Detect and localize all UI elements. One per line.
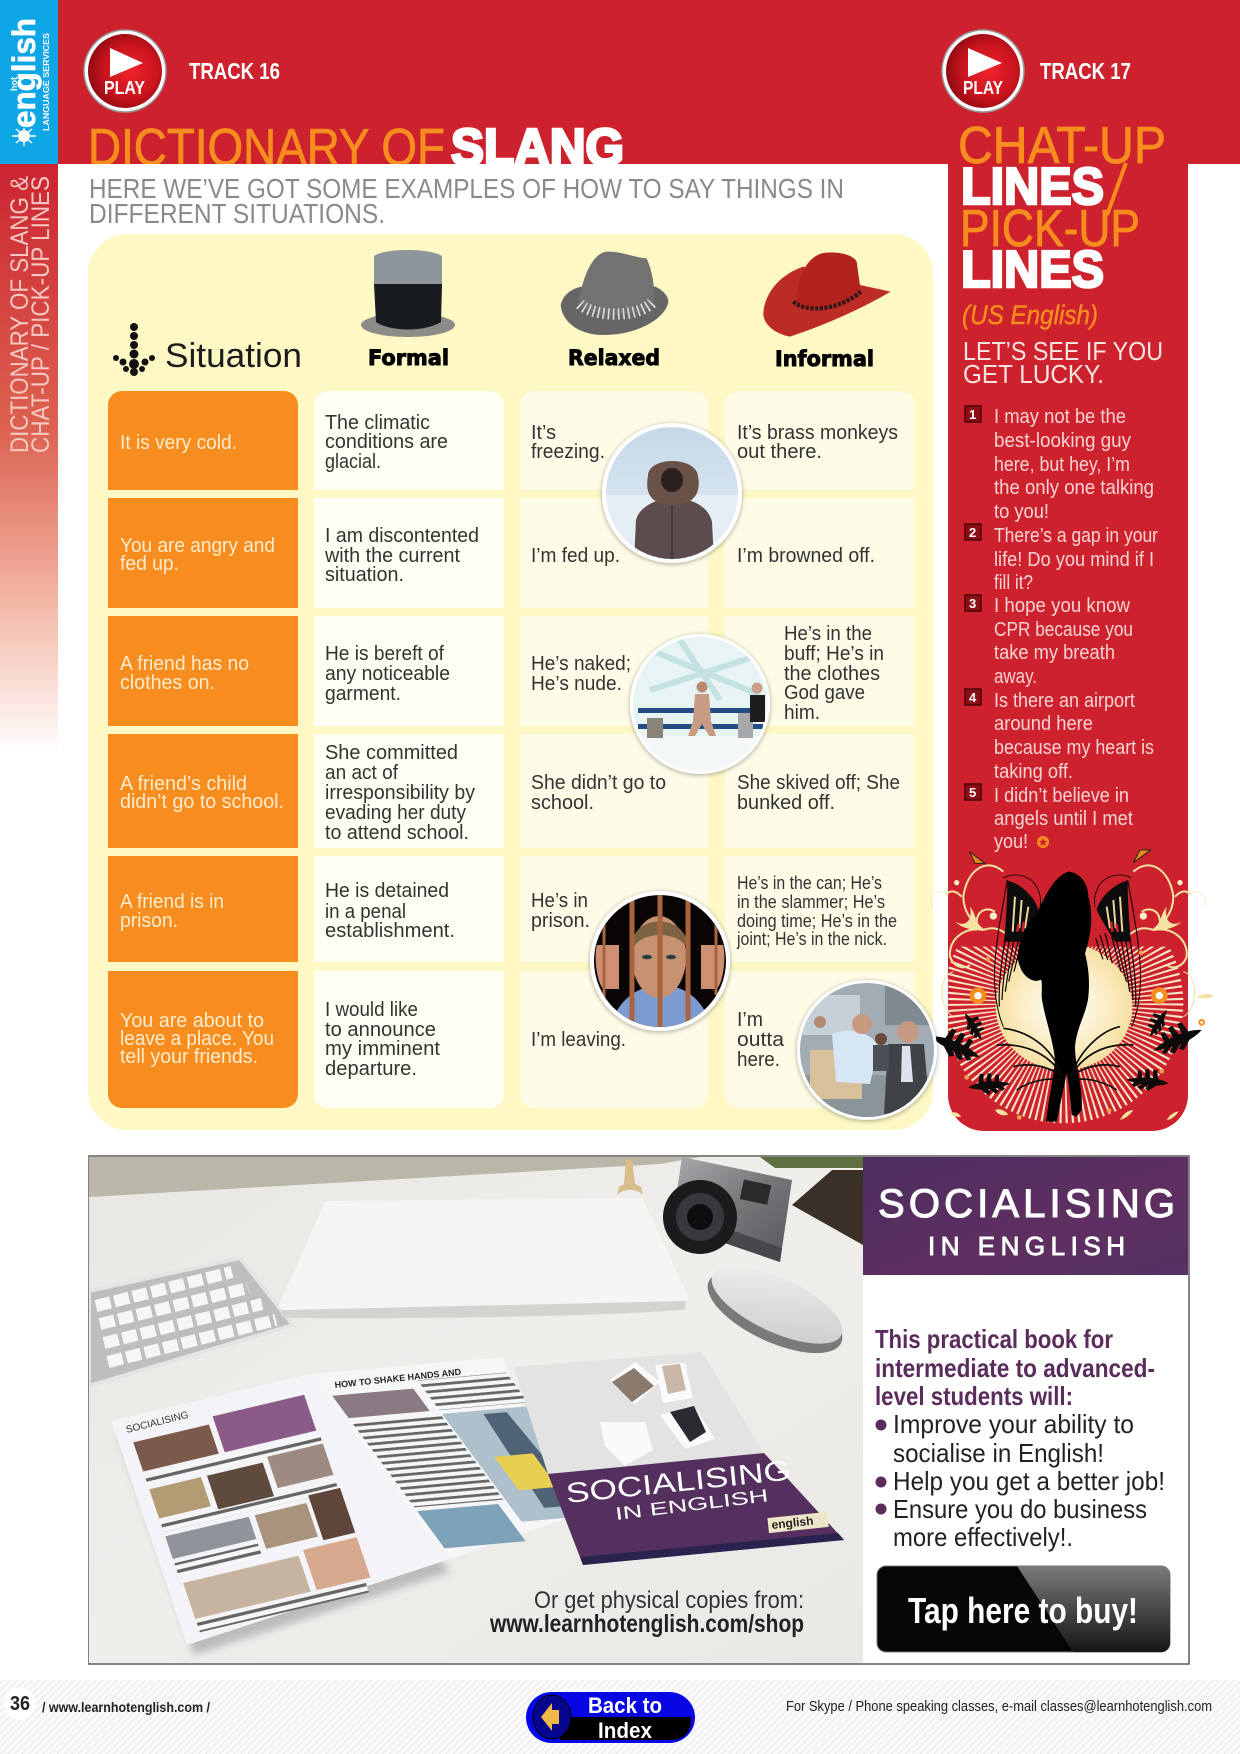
- button: tap here to buy: Tap here to buy!: [908, 1590, 1138, 1631]
- mouse: [708, 1276, 842, 1354]
- book cover: IN ENGLISH: [614, 1485, 769, 1524]
- heading: chat-up lines / pick-up lines: LINES: [961, 241, 1104, 299]
- heading: chat-up lines / pick-up lines: LINES: [961, 158, 1104, 216]
- formal column text: in a penal: [325, 901, 406, 923]
- relaxed column text: prison.: [531, 910, 590, 932]
- benefit bullet list: Help you get a better job!: [893, 1466, 1165, 1496]
- list item 1: the only one talking: [994, 477, 1154, 499]
- column head: relaxed with fedora: [561, 252, 668, 370]
- photo: man in parka in the snow: [600, 423, 744, 565]
- heading: chat-up lines / pick-up lines: [958, 117, 1166, 299]
- informal column text: here.: [737, 1049, 780, 1071]
- formal column text: situation.: [325, 564, 404, 586]
- footer strip: [0, 1680, 1240, 1754]
- column head: relaxed with fedora: Relaxed: [568, 346, 660, 370]
- button: back to index: Index: [598, 1718, 653, 1743]
- list item 2: 2: [969, 525, 976, 540]
- list item 2: fill it?: [994, 572, 1033, 594]
- benefit bullet list: Ensure you do business: [893, 1494, 1147, 1524]
- informal column text: doing time; He’s in the: [737, 911, 897, 931]
- informal column text: It’s brass monkeys: [737, 422, 898, 444]
- formal column text: I am discontented: [325, 525, 479, 547]
- relaxed column text: He’s in: [531, 890, 588, 912]
- benefit bullet list: Improve your ability to: [893, 1409, 1134, 1439]
- situation column text: You are angry and: [120, 535, 275, 557]
- list item 4: taking off.: [994, 761, 1073, 783]
- page number: [4, 1688, 36, 1720]
- column head: formal with top hat: Formal: [368, 346, 449, 370]
- open magazine: left page: SOCIALISING: [125, 1410, 190, 1436]
- photo: desk with magazine: [89, 1157, 863, 1663]
- list item 1: 1: [969, 407, 976, 422]
- informal column text: out there.: [737, 441, 822, 463]
- page number: 36: [10, 1693, 30, 1715]
- relaxed column text: I’m fed up.: [531, 545, 620, 567]
- panel: chat-up lines column: [924, 117, 1214, 1131]
- situation column text: didn’t go to school.: [120, 791, 284, 813]
- situation column text: prison.: [120, 910, 178, 932]
- heading: chat-up lines / pick-up lines: CHAT-UP: [958, 117, 1166, 175]
- list item 3: away.: [994, 666, 1037, 688]
- list item 1: [965, 406, 1154, 523]
- title: dictionary of slang: [91, 127, 622, 164]
- book cover: [514, 1352, 844, 1565]
- benefit bullet list: [876, 1409, 1165, 1552]
- banner: socialising in english: [863, 1157, 1188, 1275]
- relaxed column text: It’s: [531, 422, 556, 444]
- open magazine: left page: [111, 1374, 450, 1655]
- wooden object: [617, 1159, 643, 1195]
- subheading: [89, 173, 844, 229]
- relaxed column: pale cells: [520, 391, 708, 1108]
- situation column text: leave a place. You: [120, 1028, 274, 1050]
- list item 5: I didn’t believe in: [994, 785, 1129, 807]
- benefit bullet list: more effectively!.: [893, 1522, 1073, 1552]
- photo: naked man in airport lounge: [630, 634, 770, 776]
- list item 4: because my heart is: [994, 737, 1154, 759]
- informal column text: bunked off.: [737, 792, 835, 814]
- relaxed column text: school.: [531, 792, 594, 814]
- list item 3: [965, 595, 1133, 688]
- situation column text: [120, 432, 284, 1068]
- situation column text: fed up.: [120, 553, 179, 575]
- caption: or get physical copies: www.learnhotenglish.com/shop: [489, 1610, 804, 1638]
- title: dictionary of slang: DICTIONARY OF: [88, 119, 445, 177]
- keyboard: [89, 1258, 293, 1386]
- relaxed column text: She didn’t go to: [531, 772, 666, 794]
- formal column text: glacial.: [325, 451, 381, 473]
- intro: let's see if you get lucky: GET LUCKY.: [963, 359, 1104, 389]
- formal column text: irresponsibility by: [325, 782, 475, 804]
- list item 2: There’s a gap in your: [994, 525, 1158, 547]
- relaxed column text: He’s nude.: [531, 673, 622, 695]
- book cover: SOCIALISING: [564, 1455, 792, 1509]
- informal column text: God gave: [784, 682, 865, 704]
- informal column: pale cells: [725, 391, 915, 1108]
- advert blurb: intermediate to advanced-: [875, 1353, 1155, 1383]
- subheading: DIFFERENT SITUATIONS.: [89, 198, 385, 229]
- list item 2: life! Do you mind if I: [994, 549, 1154, 571]
- informal column text: I’m browned off.: [737, 545, 875, 567]
- list item 1: to you!: [994, 501, 1049, 523]
- panel: socialising in english advert: [89, 1156, 1189, 1664]
- informal column text: in the slammer; He’s: [737, 892, 885, 912]
- formal column text: an act of: [325, 762, 398, 784]
- panel: slang table: [88, 234, 933, 1130]
- footer website: / www.learnhotenglish.com /: [42, 1699, 210, 1715]
- list item 4: [965, 689, 1154, 783]
- list item 1: here, but hey, I’m: [994, 454, 1130, 476]
- formal column text: I would like: [325, 999, 418, 1021]
- side tab: gradient with vertical section title: DICTIONARY OF SLANG &: [6, 176, 34, 453]
- formal column text: my imminent: [325, 1038, 440, 1060]
- subheading: US English: (US English): [962, 300, 1098, 330]
- list item 4: around here: [994, 713, 1093, 735]
- play button: track 16: PLAY: [104, 78, 145, 98]
- list item 3: CPR because you: [994, 619, 1133, 641]
- list item 3: I hope you know: [994, 595, 1131, 617]
- informal column text: buff; He’s in: [784, 643, 884, 665]
- intro: let's see if you get lucky: LET’S SEE IF YOU: [963, 336, 1163, 366]
- advert blurb: level students will:: [875, 1381, 1073, 1411]
- formal column text: garment.: [325, 683, 401, 705]
- list item 5: [965, 784, 1133, 853]
- informal column text: He’s in the can; He’s: [737, 873, 882, 893]
- open magazine: right page: [310, 1357, 580, 1560]
- relaxed column text: He’s naked;: [531, 653, 631, 675]
- track 16 label: TRACK 16: [189, 58, 280, 84]
- closed laptop: [283, 1202, 684, 1317]
- informal column text: joint; He’s in the nick.: [736, 929, 887, 949]
- side tab: gradient with vertical section title: CHAT-UP / PICK-UP LINES: [27, 176, 55, 453]
- button: back to index: [526, 1692, 695, 1743]
- list item 2: [965, 524, 1158, 594]
- list item 4: Is there an airport: [994, 690, 1135, 712]
- banner: socialising in english: IN ENGLISH: [928, 1231, 1125, 1261]
- play button: track 16: [84, 30, 166, 112]
- situation column: orange cells: [108, 391, 298, 1108]
- subheading: HERE WE’VE GOT SOME EXAMPLES OF HOW TO SAY THINGS IN: [89, 173, 844, 204]
- banner: socialising in english: SOCIALISING: [878, 1182, 1175, 1226]
- formal column text: [324, 412, 479, 1080]
- informal column text: the clothes: [784, 663, 880, 685]
- formal column text: She committed: [325, 742, 458, 764]
- advert blurb: This practical book for: [875, 1324, 1113, 1354]
- caption: or get physical copies: [489, 1587, 804, 1638]
- formal column text: departure.: [325, 1058, 417, 1080]
- illustration: winged angel silhouette: [924, 850, 1214, 1122]
- relaxed column text: I’m leaving.: [531, 1029, 626, 1051]
- column head: formal with top hat: [361, 250, 455, 370]
- camera: [663, 1157, 792, 1262]
- button: tap here to buy: [877, 1566, 1170, 1652]
- list item 1: I may not be the: [994, 406, 1126, 428]
- logo: hot english language services: [0, 0, 58, 164]
- list item 5: 5: [969, 785, 976, 800]
- list item 4: 4: [969, 690, 977, 705]
- advert blurb: [875, 1324, 1155, 1411]
- title: dictionary of slang: SLANG: [451, 119, 624, 177]
- situation column text: A friend is in: [120, 891, 224, 913]
- play button: track 17: [942, 30, 1024, 112]
- button: back to index: Back to: [588, 1693, 662, 1718]
- situation column text: clothes on.: [120, 672, 215, 694]
- side tab: gradient with vertical section title: [0, 164, 58, 754]
- situation column text: A friend’s child: [120, 773, 247, 795]
- formal column text: He is detained: [325, 880, 449, 902]
- benefit bullet list: socialise in English!: [893, 1438, 1104, 1468]
- informal column text: He’s in the: [784, 623, 872, 645]
- situation column text: It is very cold.: [120, 432, 237, 454]
- informal column text: outta: [737, 1029, 785, 1051]
- open magazine: right page: HOW TO SHAKE HANDS AND: [334, 1367, 462, 1390]
- relaxed column text: freezing.: [531, 441, 605, 463]
- logo: hot english language services: english: [6, 18, 42, 128]
- informal column text: [736, 422, 900, 1071]
- list item 5: angels until I met: [994, 808, 1133, 830]
- formal column text: conditions are: [325, 431, 448, 453]
- list item 3: 3: [969, 596, 976, 611]
- relaxed column text: [531, 422, 666, 1051]
- formal column text: to attend school.: [325, 822, 469, 844]
- informal column text: him.: [784, 702, 820, 724]
- photo: office workers: [797, 980, 940, 1120]
- red header band: [58, 0, 1240, 164]
- track 17 label: TRACK 17: [1040, 58, 1131, 84]
- informal column text: I’m: [737, 1009, 763, 1031]
- informal column text: She skived off; She: [737, 772, 900, 794]
- logo: hot english language services: LANGUAGE SERVICES: [42, 32, 51, 131]
- situation column text: A friend has no: [120, 653, 249, 675]
- formal column text: establishment.: [325, 920, 455, 942]
- column head: informal with cowboy hat: Informal: [775, 347, 874, 371]
- caption: or get physical copies: Or get physical copies from:: [534, 1587, 804, 1614]
- situation column text: tell your friends.: [120, 1046, 258, 1068]
- formal column text: evading her duty: [325, 802, 466, 824]
- heading: chat-up lines / pick-up lines: PICK-UP: [960, 200, 1140, 258]
- formal column text: The climatic: [325, 412, 430, 434]
- formal column text: He is bereft of: [325, 643, 444, 665]
- book cover: english: [771, 1514, 814, 1532]
- logo: hot english language services: hot: [9, 77, 19, 91]
- column head: situation: [113, 323, 302, 376]
- list item 3: take my breath: [994, 642, 1115, 664]
- list item 5: you!: [994, 831, 1028, 853]
- column head: informal with cowboy hat: [763, 252, 891, 371]
- situation column text: You are about to: [120, 1010, 264, 1032]
- photo: man behind prison bars: [590, 888, 730, 1031]
- play button: track 17: PLAY: [963, 78, 1003, 98]
- formal column: pale cells: [314, 391, 504, 1108]
- list item 1: best-looking guy: [994, 430, 1131, 452]
- formal column text: with the current: [324, 545, 460, 567]
- column head: situation: Situation: [165, 337, 302, 375]
- intro: let's see if you get lucky: [963, 336, 1163, 389]
- formal column text: any noticeable: [325, 663, 450, 685]
- formal column text: to announce: [325, 1019, 436, 1041]
